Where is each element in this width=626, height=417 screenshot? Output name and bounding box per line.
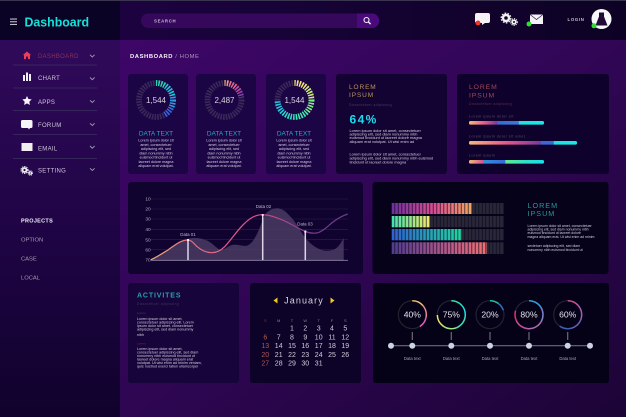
calendar dates: 16 [301, 343, 309, 350]
panel: projects list: PROJECTS [21, 218, 53, 224]
panel: activities [128, 283, 239, 383]
card heading: IPSUM [349, 92, 374, 99]
calendar dates: 24 [315, 352, 323, 359]
card body text: euismod tincidunt ut [140, 156, 172, 160]
card heading: IPSUM [469, 92, 495, 99]
calendar dates: 12 [341, 334, 349, 342]
ring: 60% [554, 301, 582, 329]
y axis labels: 10 [145, 196, 151, 202]
activity entry 2: Lorem ipsum dolor sit amet, [137, 347, 182, 351]
card body text: adipiscing elit, sed diam nonummy nibh euismod [350, 155, 433, 160]
activity entry 1 [137, 311, 194, 337]
calendar dates: 3 [317, 326, 321, 332]
ring: 60%: 60% [559, 310, 577, 320]
heading: LOREM [528, 201, 558, 210]
panel: line chart [128, 182, 363, 274]
calendar dates: 4 [330, 326, 334, 332]
panel: percentage timeline [373, 283, 609, 383]
card body text: Lorem ipsum dolor sit [138, 138, 174, 142]
timeline labels: Data text [559, 356, 577, 361]
weekday headers: F [331, 318, 334, 323]
calendar dates: 1 [290, 326, 294, 332]
marker: data 02 [256, 204, 272, 260]
panel: percentage card [336, 74, 447, 174]
ring: 80% [515, 301, 543, 329]
timeline labels: Data text [404, 356, 422, 361]
icon: mail notification [526, 14, 543, 26]
calendar dates: 21 [275, 352, 283, 359]
baseline [151, 259, 348, 261]
marker: data 02: Data 02 [256, 204, 272, 209]
search bar: SEARCH [154, 18, 176, 24]
panel: stat card 2: DATA TEXT [207, 130, 241, 138]
segmented bar chart [392, 203, 504, 254]
panel: calendar [250, 283, 361, 383]
panel: stat card 1: DATA TEXT [139, 130, 173, 138]
card body text [138, 138, 174, 168]
timeline labels [404, 356, 577, 361]
body text: adipiscing elit, sed diam nonummy nibh [528, 227, 589, 231]
card body text: aliquam erat volutpat. [206, 164, 242, 168]
y axis labels: 30 [145, 216, 151, 222]
panel: stat card 3: DATA TEXT [277, 130, 311, 138]
calendar dates: 29 [288, 360, 296, 368]
card body text: diam nonummy nibh [277, 151, 311, 155]
donut chart: 1,544: 1,544 [146, 96, 167, 105]
activity entry 2: Lorem [137, 342, 146, 346]
panel: stat card 3 [266, 74, 326, 174]
activity entry 1: Lorem ipsum dolor sit amet, [137, 317, 182, 321]
calendar dates [261, 326, 349, 368]
card body text: euismod tincidunt ut laoreet dolore magna [350, 135, 423, 140]
weekday headers: T [317, 318, 320, 323]
ring: 75% [437, 301, 465, 329]
body text: magna aliquam erat. Ut wisi enim ad minim [528, 235, 594, 239]
calendar dates: 25 [328, 352, 336, 359]
weekday headers: S [344, 318, 347, 323]
timeline labels: Data text [521, 356, 538, 361]
calendar dates: 27 [261, 360, 269, 368]
calendar dates: 20 [261, 352, 269, 359]
activity entry 1: Lorem [137, 311, 146, 315]
calendar dates: 11 [328, 334, 336, 342]
card body text [206, 138, 242, 168]
ring: 20% [476, 301, 504, 329]
ring: 75%: 75% [443, 310, 460, 320]
calendar dates: 19 [341, 343, 349, 350]
card body text: adipiscing elit, sed [279, 147, 309, 151]
body text: euismod tincidunt ut laoreet dolore [528, 231, 581, 235]
card body text: laoreet dolore magna [277, 160, 312, 164]
card body text: euismod tincidunt ut [208, 156, 240, 160]
calendar dates: 7 [277, 334, 281, 342]
card body text: adipiscing elit, sed [141, 147, 171, 151]
calendar dates: 28 [275, 360, 283, 368]
y axis labels: 70 [145, 258, 151, 264]
menu item: chart: CHART [38, 76, 60, 82]
heading: ACTIVITES [137, 292, 181, 299]
calendar dates: 6 [263, 334, 267, 342]
menu item: dashboard: DASHBOARD [38, 54, 79, 60]
donut chart: 2,487: 2,487 [214, 96, 235, 105]
calendar dates: 17 [315, 343, 323, 350]
card body text: amet, consectetuer [208, 143, 240, 147]
calendar dates: 9 [303, 334, 307, 342]
donut chart: 1,544: 1,544 [284, 96, 305, 105]
card body text: Lorem ipsum dolor sit amet, consectetuer [350, 152, 422, 156]
panel: sidebar menu [13, 52, 97, 175]
grid lines [151, 199, 348, 250]
progress bar 3: Lorem ipsum [469, 154, 495, 158]
marker: data 03 [297, 221, 313, 260]
timeline labels: Data text [443, 356, 461, 361]
menu item: apps: APPS [38, 100, 55, 106]
body text: Lorem ipsum dolor sit amet, consectetuer [528, 224, 593, 228]
calendar dates: 26 [341, 352, 349, 359]
y axis labels: 60 [145, 248, 151, 254]
calendar dates: 31 [315, 360, 323, 368]
breadcrumb: DASHBOARD / HOME [130, 54, 200, 60]
marker: data 01: Data 01 [180, 232, 196, 237]
card body text: adipiscing elit, sed [209, 147, 239, 151]
weekday headers: M [277, 318, 280, 323]
body text [528, 224, 594, 252]
logo title: Dashboard [24, 14, 89, 30]
menu item: forum: FORUM [38, 123, 62, 129]
activity entry 1: adipiscing elit, sed diam nonummy [137, 327, 194, 331]
panel: stat card 1 [128, 74, 188, 174]
activity entry 2 [137, 342, 202, 368]
calendar dates: 22 [288, 352, 296, 359]
card body text: tincidunt ut laoreet dolore magna [350, 159, 407, 164]
card body text [350, 128, 433, 164]
card body text: aliquam erat volutpat. [138, 164, 174, 168]
y axis labels [145, 196, 151, 264]
activity entry 2: nonummy nibh euismod tincidunt ut [137, 354, 195, 358]
body text: nonummy nibh euismod tincidunt ut [528, 248, 583, 252]
card body text: amet, consectetuer [278, 143, 310, 147]
month header: January [284, 295, 324, 305]
ring: 80%: 80% [520, 310, 538, 320]
menu item: email: EMAIL [38, 146, 58, 152]
activity entry 2: consectetuer adipiscing elit, sed diam [137, 350, 198, 354]
card body text: Lorem ipsum dolor sit amet, consectetuer [350, 128, 422, 133]
calendar dates: 23 [301, 352, 309, 359]
calendar dates: 5 [343, 326, 347, 332]
card body text: Lorem ipsum dolor sit [276, 138, 312, 142]
heading: IPSUM [528, 209, 555, 218]
panel: stat card 2 [196, 74, 256, 174]
progress bar 1 [469, 114, 544, 125]
icon: user avatar [592, 9, 612, 29]
calendar dates: 13 [261, 343, 269, 350]
y axis labels: 40 [145, 227, 151, 233]
body text: sectetuer adipiscing elit, sed diam [528, 244, 580, 248]
calendar dates: 10 [315, 334, 323, 342]
progress bar 2 [469, 134, 577, 145]
card body text: aliquam erat volutpat. Ut wisi enim ad [350, 139, 414, 144]
panel: progress bars card [457, 74, 609, 174]
ring: 40%: 40% [404, 310, 421, 320]
activity entry 2: quis nostrud exerci tation ullamcorper [137, 364, 199, 368]
panel: projects list [21, 218, 53, 282]
login label: LOGIN [568, 17, 585, 22]
activity entry 2: laoreet dolore magna aliquam erat [137, 358, 193, 362]
ring: 40% [398, 301, 426, 329]
icon: menu [10, 18, 17, 25]
ring: 20%: 20% [481, 310, 499, 320]
card body text: euismod tincidunt ut [278, 156, 310, 160]
activity entry 1: consectetuer adipiscing elit. Lorem [137, 320, 194, 324]
panel: projects list: CASE [21, 256, 37, 262]
marker: data 01 [180, 232, 196, 260]
panel: progress bars card: Dissectetuer adipiscing [469, 102, 512, 106]
sidebar background [0, 40, 120, 417]
card body text: adipiscing elit, sed diam nonummy nibh [350, 131, 417, 136]
weekday headers [264, 318, 347, 323]
weekday headers: S [264, 318, 267, 323]
calendar dates: 2 [303, 326, 307, 332]
calendar dates: 8 [290, 334, 294, 342]
activity entry 2: volutpat. Ut wisi enim ad minim veniam, [137, 361, 202, 365]
progress bar 3 [469, 154, 544, 164]
y axis labels: 50 [145, 238, 151, 244]
card body text: laoreet dolore magna [139, 160, 174, 164]
calendar dates: 15 [288, 343, 296, 350]
card heading: LOREM [349, 84, 377, 91]
card body text: diam nonummy nibh [207, 151, 241, 155]
calendar dates: 18 [328, 343, 336, 350]
panel: segmented bars [372, 182, 608, 274]
weekday headers: T [291, 318, 294, 323]
area series [151, 208, 344, 261]
card body text: laoreet dolore magna [207, 160, 242, 164]
card body text: diam nonummy nibh [139, 151, 173, 155]
progress bar 1: Lorem ipsum dolor sit [469, 114, 514, 118]
line series [151, 214, 348, 260]
panel: activities: Dissectetuer adipiscing [137, 302, 179, 306]
card heading: LOREM [469, 84, 498, 91]
panel: percentage card: Dissectetuer adipiscing [349, 103, 392, 107]
menu item: setting: SETTING [38, 168, 66, 174]
activity entry 1: nibh [137, 333, 144, 337]
panel: projects list: OPTION [21, 238, 43, 244]
y axis labels: 20 [145, 206, 151, 212]
search bar [141, 14, 379, 28]
progress bar 2: Lorem ipsum dolor sit amet, [469, 134, 527, 138]
calendar dates: 14 [275, 343, 283, 350]
card body text: Lorem ipsum dolor sit [206, 138, 242, 142]
icon: settings gears [501, 13, 517, 25]
timeline track [388, 332, 593, 349]
timeline labels: Data text [482, 356, 499, 361]
marker: data 03: Data 03 [297, 221, 313, 226]
header bar [0, 0, 626, 40]
card body text [276, 138, 312, 168]
stat: 64%: 64% [350, 112, 378, 126]
activity entry 1: ipsum dolor sit amet, consectetuer [137, 324, 194, 328]
icon: chat notification [475, 13, 490, 26]
calendar dates: 30 [301, 360, 309, 368]
weekday headers: W [303, 318, 307, 323]
card body text: amet, consectetuer [140, 143, 172, 147]
card body text: aliquam erat volutpat. [276, 164, 312, 168]
panel: projects list: LOCAL [21, 276, 41, 282]
